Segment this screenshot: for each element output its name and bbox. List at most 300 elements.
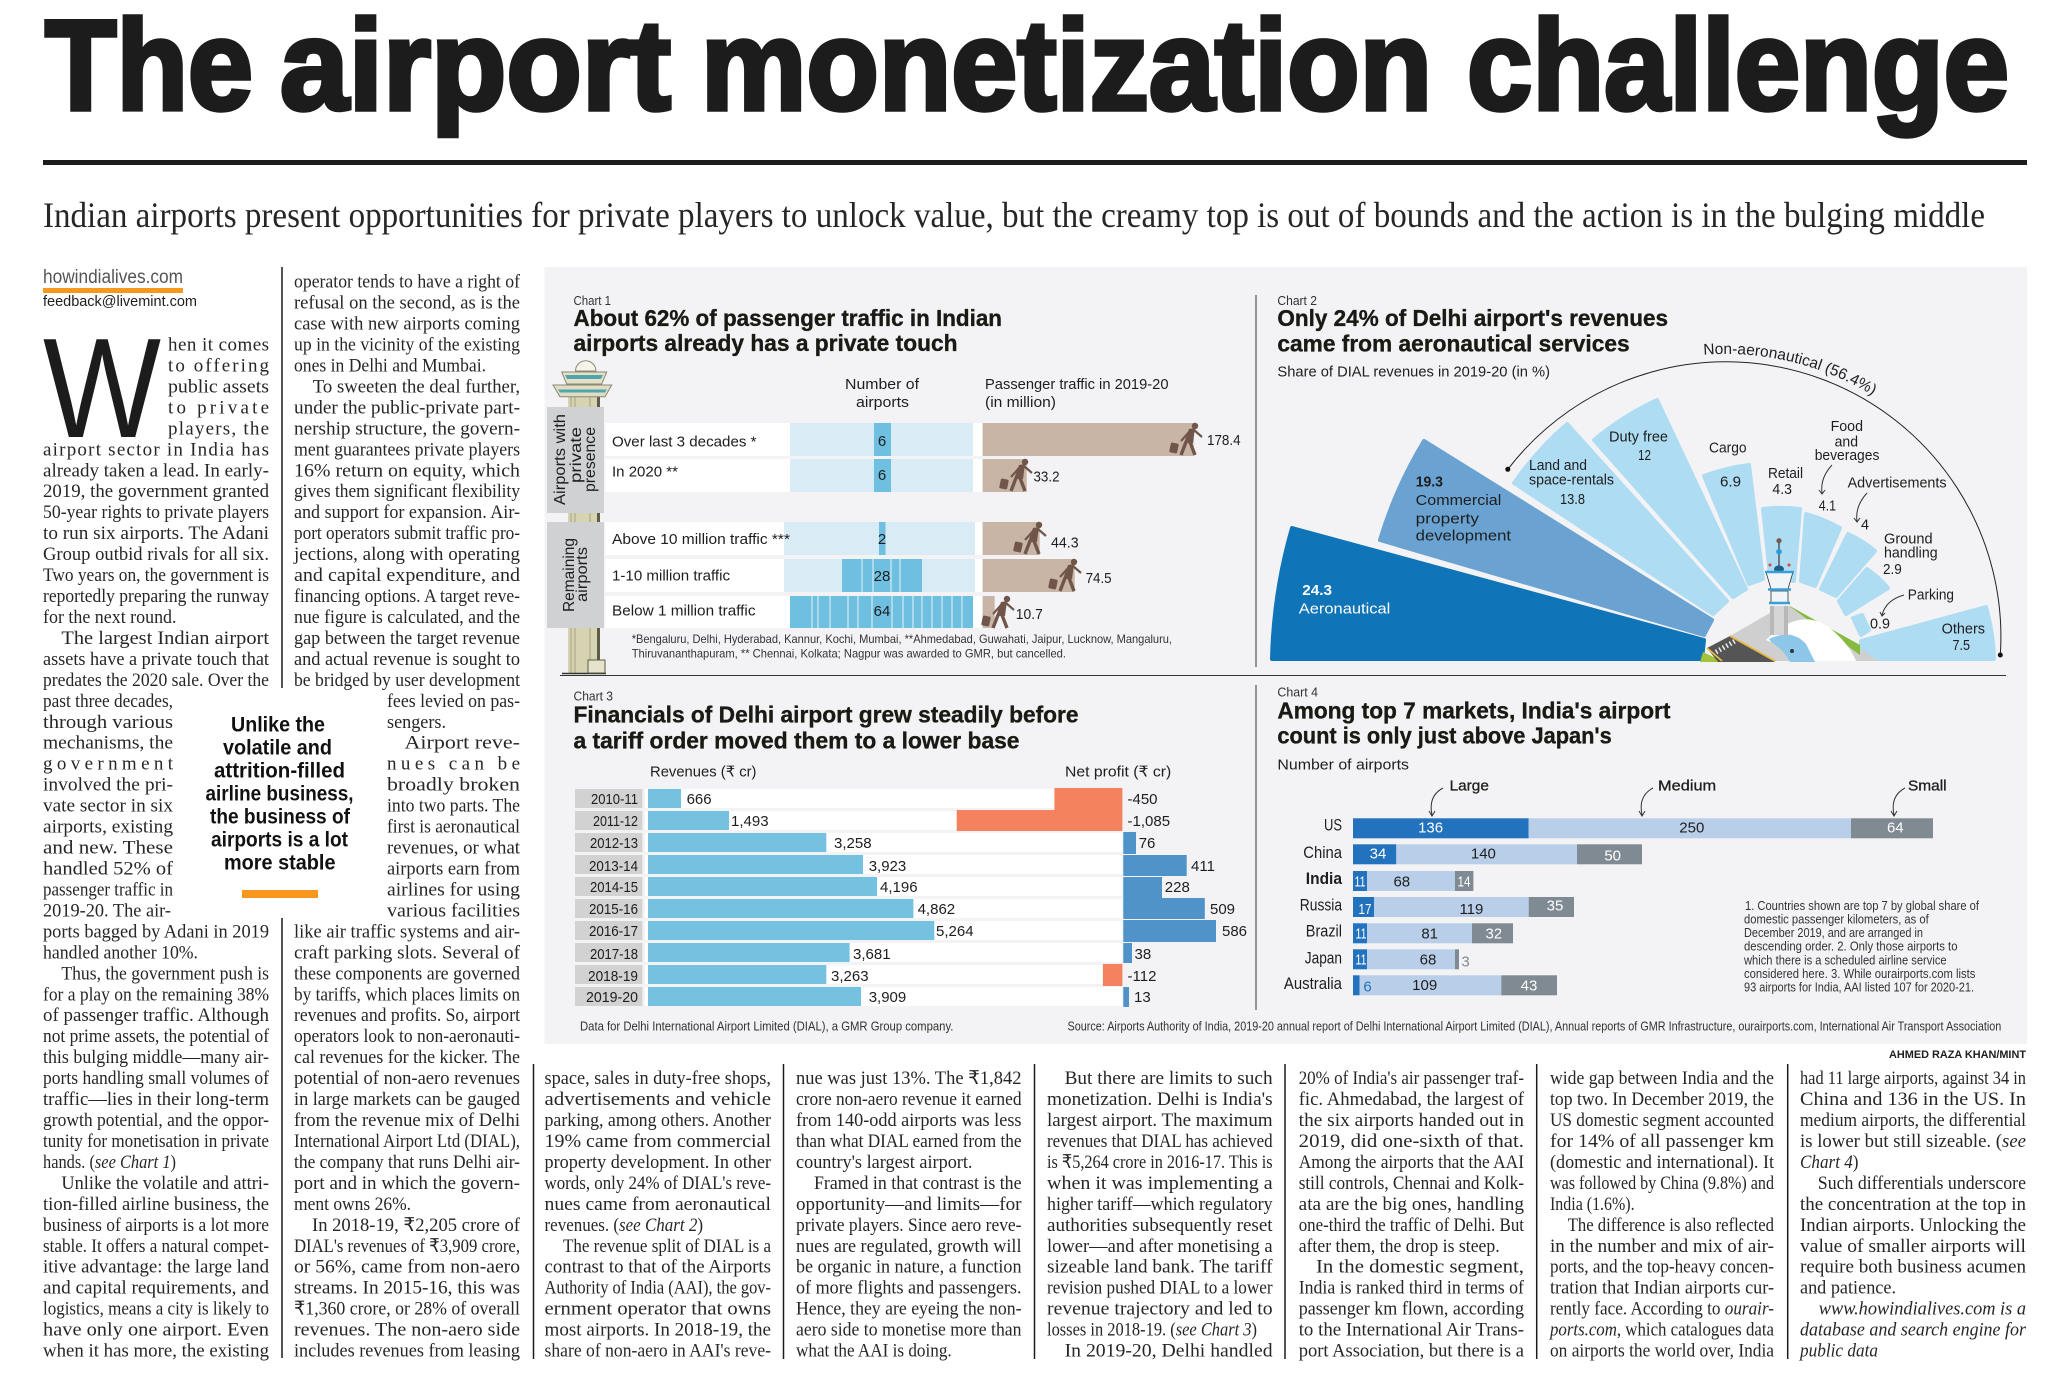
passenger traffic values: 178.4 <box>1207 432 1241 449</box>
article column 1: 2019-20. The air- <box>43 900 171 921</box>
chart 2 subtitle: Share of DIAL revenues in 2019-20 (in %) <box>1277 364 1550 381</box>
article column 8: and patience. <box>1800 1278 1896 1299</box>
article column 8: public data <box>1798 1341 1878 1362</box>
article column 2: nue figure is calculated, and the <box>294 607 520 628</box>
article column 6: passenger km flown, according <box>1299 1299 1524 1320</box>
year labels: 2011-12 <box>593 813 638 830</box>
pull quote <box>206 714 354 898</box>
article column 3: The revenue split of DIAL is a <box>563 1236 772 1257</box>
large airport bars <box>1353 818 1529 995</box>
article column 2: various facilities <box>387 900 520 921</box>
icon: control tower <box>553 361 612 674</box>
wedge: commercial property development <box>1380 441 1712 635</box>
bar values: 14 <box>1458 874 1470 891</box>
bar values: 109 <box>1412 977 1437 994</box>
article column 2: under the public-private part- <box>294 397 520 418</box>
wedge labels: 7.5 <box>1952 637 1970 654</box>
bar values: 68 <box>1393 874 1410 891</box>
article column 2: by tariffs, which places limits on <box>294 984 520 1005</box>
chart 4 heading: Among top 7 markets, India's airport <box>1277 697 1671 723</box>
wedge labels: Ground <box>1884 530 1933 547</box>
country labels: India <box>1306 870 1343 888</box>
article column 4: from 140-odd airports was less <box>796 1110 1022 1131</box>
article column 2: refusal on the second, as is the <box>294 292 520 314</box>
year labels: 2010-11 <box>591 791 638 808</box>
article column 4: than what DIAL earned from the <box>796 1131 1022 1152</box>
pull quote: airline business, <box>206 782 354 806</box>
article column 2: financing options. A target reve- <box>294 586 520 607</box>
wedge labels: 4 <box>1861 516 1869 533</box>
article column 2: nership structure, the govern- <box>294 418 520 439</box>
article column 4: Framed in that contrast is the <box>814 1173 1022 1194</box>
revenue values: 3,909 <box>869 989 906 1006</box>
wedge labels: 4.1 <box>1819 498 1836 515</box>
year labels <box>575 789 642 1006</box>
article column 2: ment guarantees private players <box>294 439 520 460</box>
article column 7 <box>1548 1068 1775 1362</box>
country labels <box>1284 817 1343 993</box>
chart 4 notes: descending order. 2. Only those airports to <box>1744 938 1958 954</box>
article column 7: The difference is also reflected <box>1568 1215 1774 1236</box>
article column 2: the company that runs Delhi air- <box>294 1152 520 1173</box>
article column 2: in large markets can be gauged <box>294 1089 520 1110</box>
article column 5: In 2019-20, Delhi handled <box>1065 1341 1273 1362</box>
chart 2 heading: Only 24% of Delhi airport's revenues <box>1277 305 1668 331</box>
article column 6: still controls, Chennai and Kolk- <box>1299 1173 1524 1194</box>
wedge: food and beverages <box>1801 514 1840 586</box>
article column 1: Unlike the volatile and attri- <box>61 1173 269 1194</box>
article column 1: growth potential, and the oppor- <box>43 1110 269 1131</box>
wedge labels: 2.9 <box>1883 561 1902 578</box>
article column 5 <box>1047 1068 1273 1362</box>
article column 4 <box>796 1068 1022 1362</box>
year labels: 2015-16 <box>589 901 638 918</box>
article column 7: (domestic and international). It <box>1550 1152 1775 1173</box>
net profit values: 38 <box>1134 946 1151 963</box>
article column 2: To sweeten the deal further, <box>313 376 520 397</box>
chart 3 axis titles <box>650 764 1171 781</box>
net profit values: 586 <box>1222 923 1247 940</box>
article column 3 <box>544 1068 772 1362</box>
wedge labels: 13.8 <box>1560 491 1585 508</box>
article column 2: sengers. <box>387 712 446 733</box>
airport illustration <box>1700 538 1878 662</box>
article column 4: nues are regulated, growth will <box>796 1236 1022 1257</box>
article column 6: 2019, did one-sixth of that. <box>1299 1131 1524 1152</box>
article column 2: ment owns 26%. <box>294 1194 411 1215</box>
article column 1: stable. It offers a natural compet- <box>43 1236 269 1257</box>
chart 3 axis titles: Net profit (₹ cr) <box>1065 764 1171 781</box>
article column 6: Among the airports that the AAI <box>1299 1152 1524 1173</box>
pull quote: attrition-filled <box>214 760 345 782</box>
wedge labels: 12 <box>1638 447 1651 464</box>
article column 7: ports.com, which catalogues data <box>1548 1320 1774 1341</box>
wedge: parking <box>1853 615 1869 635</box>
article column 3: contrast to that of the Airports <box>544 1257 771 1278</box>
article column 4: crore non-aero revenue it earned <box>796 1089 1022 1110</box>
chart 1 heading: About 62% of passenger traffic in Indian <box>574 305 1002 331</box>
revenue bars <box>648 789 934 1006</box>
byline: feedback@livemint.com <box>43 293 197 310</box>
revenue values: 1,493 <box>731 813 769 830</box>
bar values: 43 <box>1521 978 1537 995</box>
article column 8: require both business acumen <box>1800 1257 2026 1278</box>
passenger traffic values <box>1016 432 1241 623</box>
number of airports values: 6 <box>878 433 886 450</box>
article column 2: nues can be <box>387 754 520 775</box>
article column 6: India is ranked third in terms of <box>1299 1278 1525 1299</box>
wedge labels: beverages <box>1815 447 1879 464</box>
chart 4 notes: December 2019, and are arranged in <box>1744 925 1923 940</box>
size legend with arrows: Small <box>1908 778 1947 795</box>
article column 2: and actual revenue is sought to <box>294 649 520 670</box>
wedge labels: 0.9 <box>1870 615 1890 632</box>
article column 2: airports earn from <box>387 858 520 880</box>
article column 5: largest airport. The maximum <box>1047 1110 1273 1131</box>
article column 2: case with new airports coming <box>294 314 520 334</box>
article column 4: be organic in nature, a function <box>796 1257 1022 1278</box>
article column 1: and capital requirements, and <box>43 1278 270 1299</box>
column rules <box>282 267 1788 1359</box>
revenue values: 666 <box>687 791 712 808</box>
chart 3 heading: a tariff order moved them to a lower base <box>574 727 1020 753</box>
row labels: In 2020 ** <box>612 464 678 481</box>
medium airport bars <box>1360 818 1851 995</box>
panel: chart 2 <box>1270 293 2003 662</box>
article column 6: one-third the traffic of Delhi. But <box>1299 1215 1525 1236</box>
article column 2: into two parts. The <box>387 796 520 817</box>
article column 7: in the number and mix of air- <box>1550 1236 1774 1257</box>
article column 1: past three decades, <box>43 691 173 712</box>
article column 3: nues came from aeronautical <box>544 1194 771 1215</box>
article column 2: and support for expansion. Air- <box>294 502 520 523</box>
passenger traffic values: 10.7 <box>1016 606 1043 623</box>
article column 5: But there are limits to such <box>1065 1068 1273 1089</box>
article column 2: port operators submit traffic pro- <box>294 523 520 544</box>
article column 7: wide gap between India and the <box>1550 1068 1774 1089</box>
article column 8: Such differentials underscore <box>1818 1173 2026 1194</box>
article column 1: predates the 2020 sale. Over the <box>43 670 269 691</box>
net profit values: -1,085 <box>1128 813 1170 830</box>
wedge labels: Commercial <box>1416 492 1501 509</box>
bar values: 64 <box>1887 819 1904 836</box>
chart 2 heading <box>1277 305 1668 356</box>
panel: charts background <box>544 267 2027 1044</box>
article column 4: of more flights and passengers. <box>796 1278 1022 1299</box>
passenger traffic values: 44.3 <box>1051 535 1079 552</box>
revenue values <box>687 791 974 1006</box>
article column 6 <box>1299 1068 1525 1362</box>
article column 2: craft parking slots. Several of <box>294 942 521 963</box>
non-aeronautical arc: Non-aeronautical (56.4%) <box>1704 344 1876 396</box>
panel: chart 1 <box>547 293 1241 674</box>
year labels: 2013-14 <box>589 858 638 875</box>
wedge labels: 6.9 <box>1720 474 1741 491</box>
row group label: airports with private presence: Airports with <box>552 414 569 505</box>
revenue values: 4,862 <box>918 901 955 918</box>
article column 1: public assets <box>168 376 269 397</box>
article column 1: handled another 10%. <box>43 942 198 963</box>
size legend with arrows <box>1429 778 1947 816</box>
fan wedges <box>1272 400 1994 659</box>
country labels: Australia <box>1284 975 1343 993</box>
article column 7: India (1.6%). <box>1550 1194 1635 1215</box>
article column 2: broadly broken <box>387 775 521 796</box>
chart 4 notes: 1. Countries shown are top 7 by global share of <box>1745 898 1979 913</box>
article column 8: database and search engine for <box>1800 1320 2027 1341</box>
row labels: Below 1 million traffic <box>612 603 756 620</box>
label arrows <box>1819 465 1904 616</box>
article column 6: ata are the big ones, handling <box>1299 1194 1524 1215</box>
revenue values: 3,681 <box>853 946 891 963</box>
panel: chart 4 <box>1277 685 1979 996</box>
article column 7: on airports the world over, India <box>1550 1341 1775 1362</box>
article column 7: was followed by China (9.8%) and <box>1550 1173 1774 1194</box>
year labels: 2018-19 <box>588 968 638 985</box>
column headers: (in million) <box>985 394 1056 411</box>
article column 1: reportedly preparing the runway <box>43 586 269 607</box>
article column 1: already taken a lead. In early- <box>43 460 269 481</box>
article column 1: to offering <box>168 356 270 376</box>
wedge labels: Parking <box>1908 586 1954 603</box>
article column 5: higher tariff—which regulatory <box>1047 1194 1273 1215</box>
pull quote: volatile and <box>223 736 332 760</box>
wedge labels: Aeronautical <box>1299 600 1390 617</box>
article column 2: potential of non-aero revenues <box>294 1068 520 1089</box>
article column 1: passenger traffic in <box>43 880 173 900</box>
article column 2: from the revenue mix of Delhi <box>294 1110 520 1131</box>
article column 1: hands. (see Chart 1) <box>43 1152 176 1173</box>
article column 1: logistics, means a city is likely to <box>43 1299 269 1320</box>
article column 1: to run six airports. The Adani <box>43 523 269 544</box>
wedge: duty free <box>1594 400 1746 597</box>
chart 4 notes: considered here. 3. While ourairports.com lists <box>1744 966 1976 981</box>
article column 7: rently face. According to ourair- <box>1550 1299 1774 1320</box>
article column 4: Hence, they are eyeing the non- <box>796 1299 1022 1320</box>
article column 1: to private <box>168 397 269 418</box>
year labels: 2016-17 <box>589 923 638 940</box>
article column 4: opportunity—and limits—for <box>796 1194 1022 1215</box>
column headers: Number of <box>845 376 920 393</box>
article column 1: handled 52% of <box>43 858 174 880</box>
article column 2: cal revenues for the kicker. The <box>294 1047 520 1068</box>
wedge: aeronautical <box>1272 528 1704 659</box>
wedge labels: and <box>1835 434 1858 451</box>
article column 7: top two. In December 2019, the <box>1550 1089 1774 1110</box>
row labels: Above 10 million traffic *** <box>612 531 790 548</box>
bar values: 68 <box>1420 951 1436 968</box>
article column 1: hen it comes <box>168 334 269 356</box>
article column 5: revenue trajectory and led to <box>1047 1299 1273 1320</box>
article column 2: operators look to non-aeronauti- <box>294 1026 520 1047</box>
article column 2: ₹1,360 crore, or 28% of overall <box>294 1299 520 1320</box>
article column 8: www.howindialives.com is a <box>1819 1299 2026 1320</box>
byline: howindialives.com <box>43 267 183 288</box>
article column 1: involved the pri- <box>43 775 173 796</box>
article column 7: for 14% of all passenger km <box>1550 1131 1774 1152</box>
article column 1: Group outbid rivals for all six. <box>43 544 269 565</box>
wedge labels: Food <box>1831 418 1863 435</box>
net profit values: -450 <box>1128 791 1158 808</box>
article column 1: when it has more, the existing <box>43 1341 269 1362</box>
article column 1: business of airports is a lot more <box>43 1215 269 1236</box>
row group label: airports with private presence <box>547 407 604 513</box>
article column 1: not prime assets, the potential of <box>43 1026 270 1047</box>
chart 3 heading: Financials of Delhi airport grew steadily before <box>574 702 1078 728</box>
net profit values: 509 <box>1210 901 1235 918</box>
article column 5: revenues that DIAL has achieved <box>1047 1131 1273 1152</box>
article column 1: and new. These <box>43 838 173 858</box>
icons: traveller with suitcase <box>981 423 1202 628</box>
wedge labels: space-rentals <box>1529 471 1614 488</box>
chart 4 heading: count is only just above Japan's <box>1277 722 1612 748</box>
wedge labels: Duty free <box>1609 429 1668 446</box>
country labels: Japan <box>1305 949 1342 967</box>
row labels <box>612 434 790 620</box>
article column 2: gap between the target revenue <box>294 628 520 649</box>
article column 1: itive advantage: the large land <box>43 1257 269 1278</box>
number of airports values: 28 <box>874 568 890 585</box>
chart 2 label: Chart 2 <box>1277 293 1317 308</box>
article column 1: airport sector in India has <box>43 439 269 460</box>
wedge: advertisements <box>1821 534 1875 596</box>
article column 1: for the next round. <box>43 607 176 628</box>
article column 3: revenues. (see Chart 2) <box>544 1215 703 1236</box>
article column 2: revenues, or what <box>387 838 521 858</box>
article column 1: airports, existing <box>43 817 174 838</box>
chart 1 heading <box>574 305 1002 356</box>
passenger traffic values: 33.2 <box>1034 469 1060 486</box>
article column 6: to the International Air Trans- <box>1299 1320 1524 1341</box>
chart 4 heading <box>1277 697 1671 748</box>
net profit values: 411 <box>1191 858 1215 875</box>
pull quote: more stable <box>224 852 336 874</box>
year labels: 2019-20 <box>586 989 638 1006</box>
article column 1: Thus, the government push is <box>61 963 269 984</box>
article column 8: value of smaller airports will <box>1800 1236 2026 1257</box>
drop cap: W <box>43 309 161 468</box>
bar values: 119 <box>1459 901 1483 918</box>
article column 5: sizeable land bank. The tariff <box>1047 1257 1273 1278</box>
credit: AHMED RAZA KHAN/MINT <box>1889 1049 2026 1061</box>
country labels: US <box>1324 817 1342 835</box>
article column 8: the concentration at the top in <box>1800 1194 2026 1215</box>
wedge labels <box>1299 418 1985 654</box>
pull quote: Unlike the <box>231 714 325 736</box>
wedge: cargo <box>1704 465 1763 584</box>
article column 8: medium airports, the differential <box>1800 1110 2026 1131</box>
number of airports bars <box>790 423 973 628</box>
row group label: remaining airports: Remaining <box>561 538 578 612</box>
article column 3: ernment operator that owns <box>544 1299 771 1320</box>
article column 5: is ₹5,264 crore in 2016-17. This is <box>1047 1152 1273 1173</box>
article column 1: tion-filled airline business, the <box>43 1194 269 1215</box>
article column 3: words, only 24% of DIAL's reve- <box>544 1173 771 1194</box>
article column 2: includes revenues from leasing <box>294 1341 520 1362</box>
row group label: remaining airports: airports <box>574 547 591 602</box>
article column 3: parking, among others. Another <box>544 1110 772 1131</box>
year labels: 2017-18 <box>590 946 638 963</box>
article column 2: port and in which the govern- <box>294 1173 520 1194</box>
chart 2 heading: came from aeronautical services <box>1277 330 1630 356</box>
country labels: Russia <box>1300 897 1343 915</box>
wedge labels: Retail <box>1768 465 1803 482</box>
wedge labels: 19.3 <box>1416 474 1443 491</box>
bar values <box>1354 819 1904 996</box>
article column 1: through various <box>43 712 173 733</box>
article column 2: gives them significant flexibility <box>294 481 520 502</box>
article column 4: country's largest airport. <box>796 1152 972 1173</box>
chart 3 label: Chart 3 <box>574 689 613 704</box>
article column 6: the six airports handed out in <box>1299 1110 1524 1131</box>
article column 4: aero side to monetise more than <box>796 1320 1022 1341</box>
article column 1: 50-year rights to private players <box>43 502 269 523</box>
chart 1 heading: airports already has a private touch <box>574 330 958 356</box>
bar values: 11 <box>1356 925 1366 942</box>
title <box>45 0 2009 138</box>
article column 2: International Airport Ltd (DIAL), <box>294 1131 520 1152</box>
article column 5: monetization. Delhi is India's <box>1047 1089 1273 1110</box>
article column 2: these components are governed <box>294 963 520 984</box>
bar values: 6 <box>1363 979 1372 996</box>
small airport bars <box>1455 818 1933 995</box>
chart 3 note: Data for Delhi International Airport Limited (DIAL), a GMR Group company. <box>580 1019 953 1034</box>
article column 8 <box>1798 1068 2027 1362</box>
article column 5: revision pushed DIAL to a lower <box>1047 1278 1273 1299</box>
article column 1: this bulging middle—many air- <box>43 1047 269 1068</box>
chart 3 axis titles: Revenues (₹ cr) <box>650 764 756 781</box>
wedge labels: handling <box>1884 544 1938 561</box>
wedge labels: Cargo <box>1709 440 1747 457</box>
article column 5: authorities subsequently reset <box>1047 1215 1273 1236</box>
article column 3: advertisements and vehicle <box>544 1089 771 1110</box>
panel dividers <box>560 295 2006 1010</box>
bar values: 136 <box>1418 819 1443 836</box>
bar values: 17 <box>1358 901 1372 918</box>
article column 3: space, sales in duty-free shops, <box>544 1068 771 1089</box>
article column 2: fees levied on pas- <box>387 691 520 712</box>
year labels: 2014-15 <box>590 879 638 896</box>
article column 2: DIAL's revenues of ₹3,909 crore, <box>294 1236 520 1257</box>
article column 8: China and 136 in the US. In <box>1800 1089 2027 1110</box>
bar values: 140 <box>1471 845 1496 862</box>
article column 2: airlines for using <box>387 880 521 900</box>
bar values: 34 <box>1370 845 1386 862</box>
wedge labels: 4.3 <box>1772 481 1792 498</box>
chart 4 notes: 93 airports for India, AAI listed 107 for 2020-21. <box>1744 980 1974 994</box>
article column 2 <box>293 272 521 1362</box>
article column 1: Two years on, the government is <box>43 565 269 586</box>
bar values: 250 <box>1679 819 1704 836</box>
article column 4: nue was just 13%. The ₹1,842 <box>796 1068 1022 1089</box>
wedge: others <box>1861 607 1994 659</box>
wedge labels: Advertisements <box>1848 474 1947 491</box>
number of airports values: 64 <box>874 603 890 620</box>
article column 1: vate sector in six <box>43 796 174 817</box>
chart 3 heading <box>574 702 1078 753</box>
article column 2: up in the vicinity of the existing <box>294 334 520 356</box>
wedge: land and space-rentals <box>1514 424 1727 614</box>
bar values: 50 <box>1604 848 1621 865</box>
row bands <box>645 789 1122 1006</box>
article column 1: traffic—lies in their long-term <box>43 1089 269 1110</box>
article column 2: be bridged by user development <box>294 670 521 691</box>
row labels: Over last 3 decades * <box>612 434 757 451</box>
article column 1: ports handling small volumes of <box>43 1068 270 1089</box>
article column 5: when it was implementing a <box>1047 1173 1273 1194</box>
article column 8: is lower but still sizeable. (see <box>1800 1131 2026 1152</box>
revenue values: 3,263 <box>831 968 869 985</box>
